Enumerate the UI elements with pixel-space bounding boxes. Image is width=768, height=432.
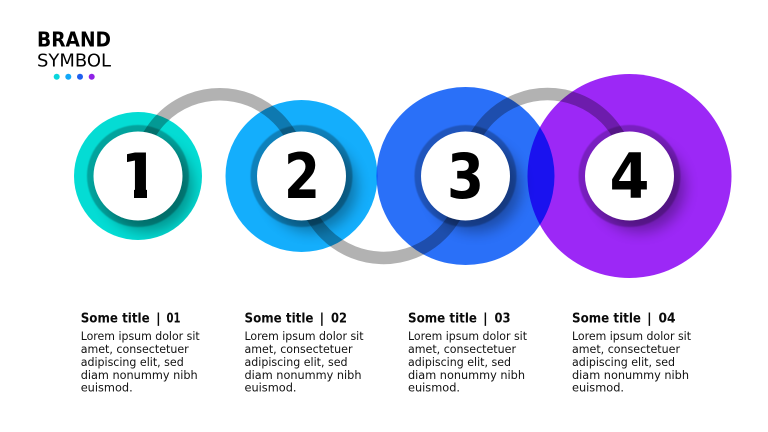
body 2 — [244, 329, 364, 394]
body 1: euismod. — [81, 380, 133, 394]
circle 4: purple — [528, 74, 732, 278]
text block 1 — [81, 312, 200, 394]
title 3: Some title — [408, 312, 477, 327]
circle 3: blue — [376, 87, 554, 265]
title 4: 04 — [658, 312, 676, 327]
body 3: adipiscing elit, sed — [408, 355, 511, 369]
body 3: diam nonummy nibh — [408, 368, 525, 382]
text block 4 — [572, 312, 692, 394]
text block 3 — [408, 312, 528, 394]
body 1: amet, consectetuer — [81, 342, 189, 356]
title 1: Some title — [81, 312, 150, 327]
logo text: BRAND: BRAND — [37, 28, 111, 52]
body 2: diam nonummy nibh — [244, 368, 362, 382]
body 1 — [81, 329, 200, 394]
body 1: adipiscing elit, sed — [81, 355, 184, 369]
number 4: 4 — [610, 140, 650, 213]
logo text: SYMBOL: SYMBOL — [37, 50, 111, 72]
body 4: adipiscing elit, sed — [572, 355, 675, 369]
number disc 4 — [585, 132, 674, 220]
body 4: euismod. — [572, 380, 624, 394]
title 2: 02 — [331, 312, 347, 327]
logo: brand symbol — [37, 28, 111, 80]
title 3: | — [483, 312, 488, 327]
body 3: euismod. — [408, 380, 460, 394]
arc connector 2 to 3 — [302, 176, 466, 258]
number 2: 2 — [284, 140, 320, 213]
title 3: 03 — [494, 312, 510, 327]
title 1: 01 — [166, 312, 180, 327]
body 2: adipiscing elit, sed — [244, 355, 348, 369]
number disc 3 — [421, 132, 510, 220]
body 4: Lorem ipsum dolor sit — [572, 329, 692, 343]
body 4: amet, consectetuer — [572, 342, 680, 356]
number disc 1 — [94, 132, 182, 220]
body 3 — [408, 329, 528, 394]
text block 2 — [244, 312, 364, 394]
number 3: 3 — [447, 140, 484, 213]
circle 1: teal — [74, 112, 202, 240]
number disc 2 — [257, 132, 346, 220]
logo dots — [54, 74, 95, 80]
body 2: euismod. — [244, 380, 296, 394]
body 4 — [572, 329, 692, 394]
body 2: Lorem ipsum dolor sit — [244, 329, 364, 343]
body 4: diam nonummy nibh — [572, 368, 689, 382]
title 1: | — [156, 312, 161, 327]
step circles diagram — [74, 74, 732, 278]
arc connector 3 to 4 — [466, 94, 630, 176]
arc connector 1 to 2 — [138, 94, 302, 176]
body 3: Lorem ipsum dolor sit — [408, 329, 528, 343]
title 2: | — [320, 312, 324, 327]
title 4: | — [647, 312, 652, 327]
circle 2: sky blue — [226, 100, 378, 252]
body 1: Lorem ipsum dolor sit — [81, 329, 200, 343]
body 3: amet, consectetuer — [408, 342, 516, 356]
title 4: Some title — [572, 312, 641, 327]
title 2: Some title — [244, 312, 314, 327]
body 2: amet, consectetuer — [244, 342, 353, 356]
number 1: 1 — [117, 140, 161, 213]
body 1: diam nonummy nibh — [81, 368, 198, 382]
